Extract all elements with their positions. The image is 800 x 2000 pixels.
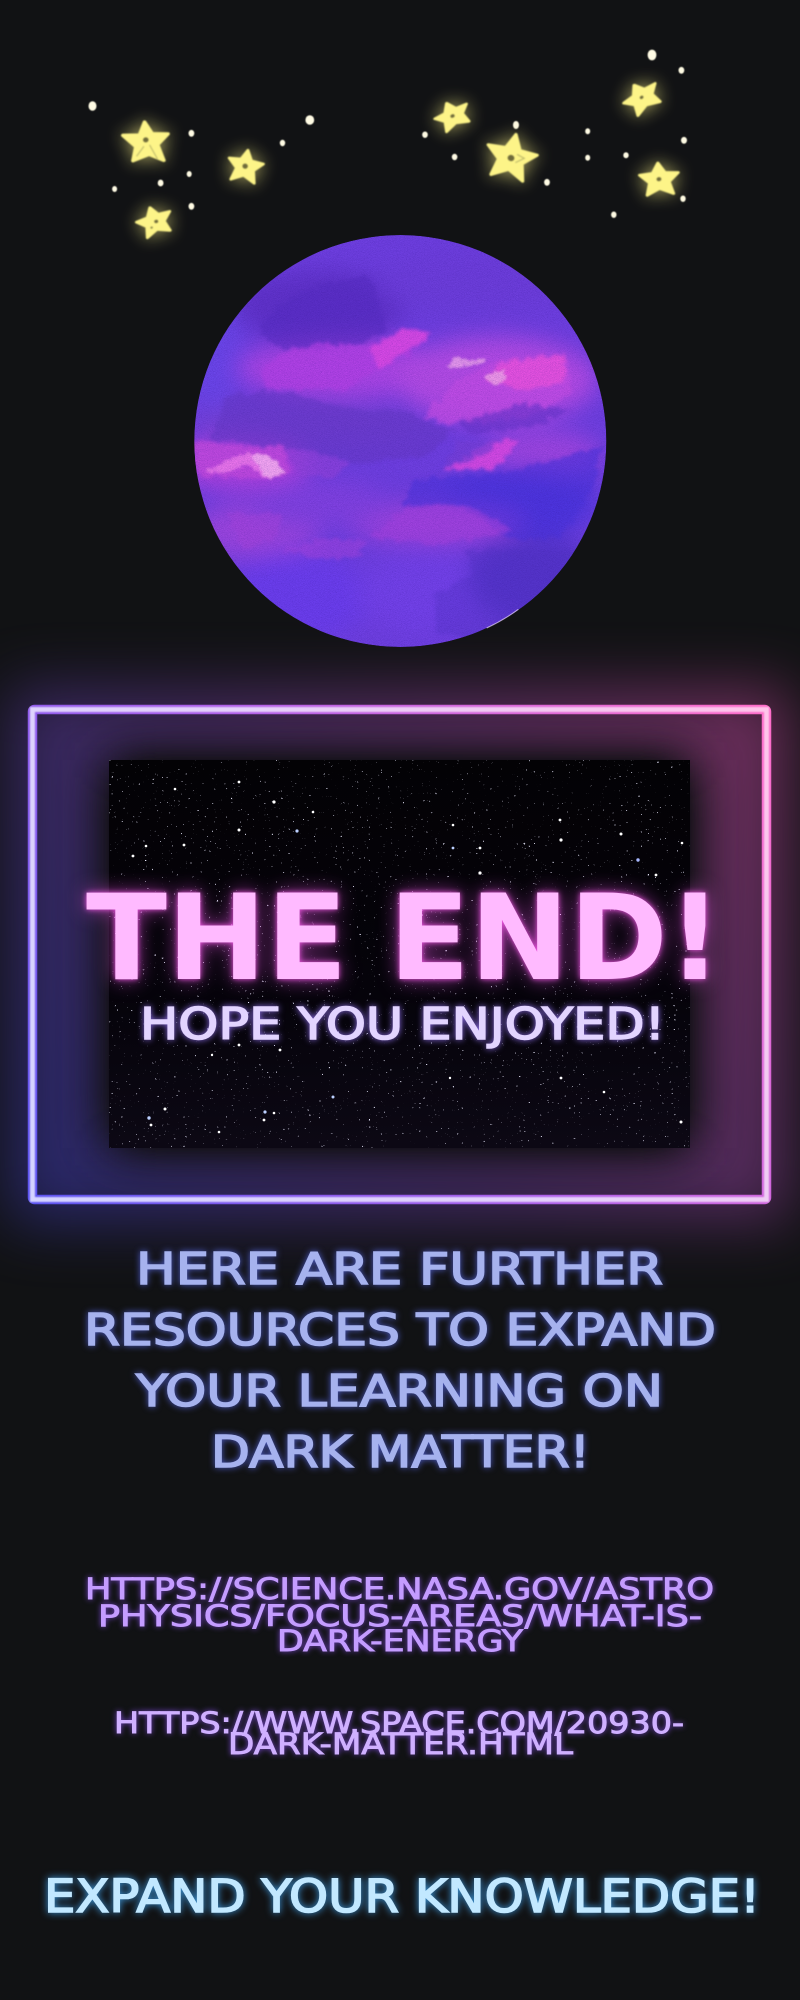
icon: yellow star 6 (619, 75, 665, 118)
link: space.com dark matter url: DARK-MATTER.HTML (228, 1727, 573, 1761)
icon: yellow star 7 (639, 162, 680, 196)
link: nasa dark energy url: PHYSICS/FOCUS-AREAS/WHAT-IS- (98, 1599, 702, 1633)
icon: yellow star 1 (122, 120, 170, 163)
heading: further resources: DARK MATTER! (211, 1427, 590, 1478)
link: space.com dark matter url: HTTPS://WWW.SPACE.COM/20930- (114, 1706, 684, 1740)
planet illustration (194, 235, 606, 647)
soft watercolor underlay (170, 250, 600, 640)
link: nasa dark energy url: DARK-ENERGY (277, 1624, 523, 1658)
title: the end: THE END! (86, 870, 722, 1008)
icon: small white dots (88, 50, 687, 218)
heading: further resources: YOUR LEARNING ON (135, 1366, 663, 1417)
stars cluster (88, 50, 687, 239)
icon: yellow star 4 (431, 96, 474, 134)
panel: neon frame with glow (10, 688, 790, 1222)
footer: expand your knowledge: EXPAND YOUR KNOWLEDGE! (44, 1870, 760, 1923)
link: nasa dark energy url: HTTPS://SCIENCE.NASA.GOV/ASTRO (85, 1572, 714, 1606)
heading: further resources: HERE ARE FURTHER (136, 1244, 663, 1295)
link: nasa dark energy url (85, 1572, 714, 1658)
heading: further resources: RESOURCES TO EXPAND (84, 1305, 716, 1356)
planet rim highlight (487, 609, 518, 628)
link: space.com dark matter url (114, 1706, 684, 1761)
panel: starfield image (109, 760, 690, 1148)
icon: yellow star 3 (134, 202, 175, 239)
frame border (32, 710, 766, 1200)
heading: further resources (84, 1244, 716, 1478)
icon: yellow star 2 (226, 147, 265, 184)
icon: yellow star 5 (482, 129, 540, 183)
subtitle: hope you enjoyed: HOPE YOU ENJOYED! (140, 999, 665, 1050)
